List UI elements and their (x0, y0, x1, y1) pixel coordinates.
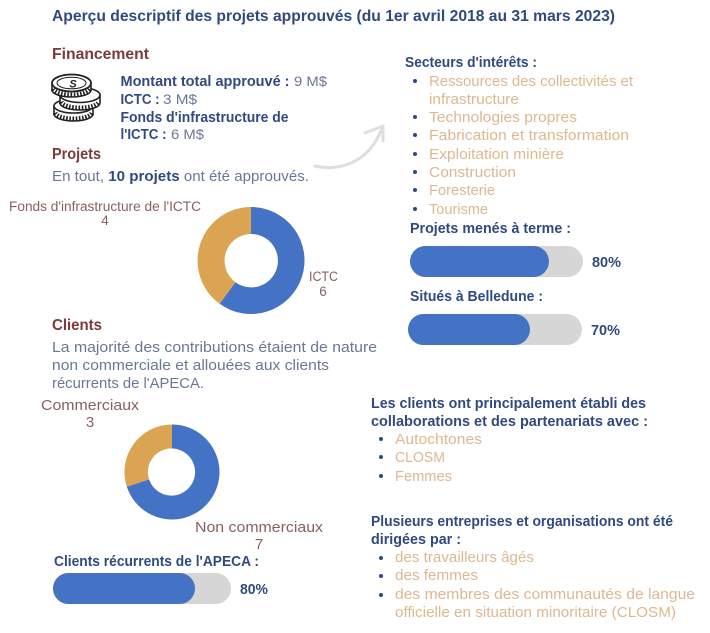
list: partenaires: Autochtones (395, 431, 482, 448)
value: 3 M$: 3 M$ (163, 91, 197, 107)
list: secteurs: Foresterie (429, 182, 495, 199)
text: ICTC: ICTC : (120, 92, 160, 108)
panel: clients (41, 317, 377, 604)
progress: clients récurrents (53, 554, 268, 604)
panel: direction des entreprises (371, 514, 695, 621)
title: Aperçu descriptif des projets approuvés (du 1er avril 2018 au 31 mars 2023) (52, 8, 615, 25)
list: partenaires (379, 431, 482, 485)
heading: collaborations: Les clients ont principalement établi des (371, 396, 646, 412)
progress: clients récurrents: 80% (240, 582, 268, 598)
progress: clients récurrents: Clients récurrents de l'APECA : (54, 554, 259, 570)
text: paragraph: récurrents de l'APECA. (52, 375, 204, 392)
label: value 4: 4 (101, 213, 109, 228)
value: 6 M$: 6 M$ (171, 126, 204, 142)
progress: projets menés à terme: 80% (592, 255, 621, 271)
text: fonds d'infrastructure: Fonds d'infrastructure de (120, 110, 288, 126)
list: secteurs: Technologies propres (429, 109, 577, 126)
panel: projets (9, 146, 338, 314)
heading: collaborations (371, 396, 648, 430)
value: 9 M$: 9 M$ (294, 73, 327, 89)
label: value 6: 6 (319, 284, 327, 299)
arrow: curved grey (315, 126, 383, 168)
list: partenaires: CLOSM (395, 449, 445, 466)
list: secteurs: infrastructure (429, 91, 519, 108)
list: secteurs: Ressources des collectivités et (429, 73, 634, 90)
icon: stack of coins (52, 74, 100, 121)
label: non commerciaux: Non commerciaux (195, 519, 324, 536)
list: secteurs: Construction (429, 164, 516, 181)
list: secteurs: Fabrication et transformation (429, 127, 629, 144)
list: groupes dirigeants: des femmes (395, 567, 478, 584)
heading: clients: Clients (52, 317, 102, 334)
progress: situés à Belledune: Situés à Belledune : (410, 289, 543, 305)
list: partenaires: Femmes (395, 468, 452, 485)
label: ICTC: ICTC (309, 269, 338, 284)
panel: secteurs d'intérêts (405, 55, 634, 345)
label: commerciaux: Commerciaux (41, 397, 140, 414)
heading: financement: Financement (52, 46, 150, 63)
progress: projets menés à terme: Projets menés à terme : (410, 221, 571, 237)
donut chart: projets par fonds (198, 207, 305, 314)
progress: situés à Belledune (408, 289, 620, 345)
heading: dirigées par: Plusieurs entreprises et organisations ont été (371, 514, 673, 530)
text: l'ICTC: l'ICTC : (120, 127, 166, 143)
donut chart: nature des clients (124, 424, 219, 520)
panel: financement (52, 46, 327, 143)
slice: non commerciaux 7 (127, 424, 219, 520)
list: groupes dirigeants: des membres des communautés de langue (395, 586, 695, 603)
list: groupes dirigeants (379, 549, 695, 621)
text: total projets: En tout, 10 projets ont été approuvés. (52, 168, 309, 185)
text: paragraph: non commerciale et allouées aux clients (52, 357, 329, 374)
icon: stack of coins: S (69, 78, 77, 90)
label: value 3: 3 (86, 414, 94, 431)
progress: projets menés à terme (410, 221, 621, 277)
slice: fonds d'infrastructure 4 (198, 207, 251, 304)
heading: secteurs: Secteurs d'intérêts : (405, 55, 537, 71)
text: montant total: Montant total approuvé : (120, 74, 290, 90)
list: secteurs (413, 73, 634, 218)
label: value 7: 7 (255, 536, 263, 553)
progress: situés à Belledune: 70% (591, 323, 620, 339)
list: secteurs: Exploitation minière (429, 146, 564, 163)
list: secteurs: Tourisme (429, 201, 488, 218)
text: paragraph (52, 339, 377, 392)
slice: ICTC 6 (220, 207, 305, 314)
heading: dirigées par (371, 514, 673, 548)
list: groupes dirigeants: des travailleurs âgés (395, 549, 534, 566)
panel: collaborations (371, 396, 648, 485)
slice: commerciaux 3 (124, 424, 172, 487)
text: paragraph: La majorité des contributions étaient de nature (52, 339, 377, 356)
heading: dirigées par: dirigées par : (371, 532, 461, 548)
heading: projets: Projets (52, 146, 101, 163)
heading: collaborations: collaborations et des partenariats avec : (371, 414, 648, 430)
label: fonds d'infrastructure: Fonds d'infrastructure de l'ICTC (9, 199, 201, 214)
list: groupes dirigeants: officielle en situation minoritaire (CLOSM) (395, 604, 676, 621)
